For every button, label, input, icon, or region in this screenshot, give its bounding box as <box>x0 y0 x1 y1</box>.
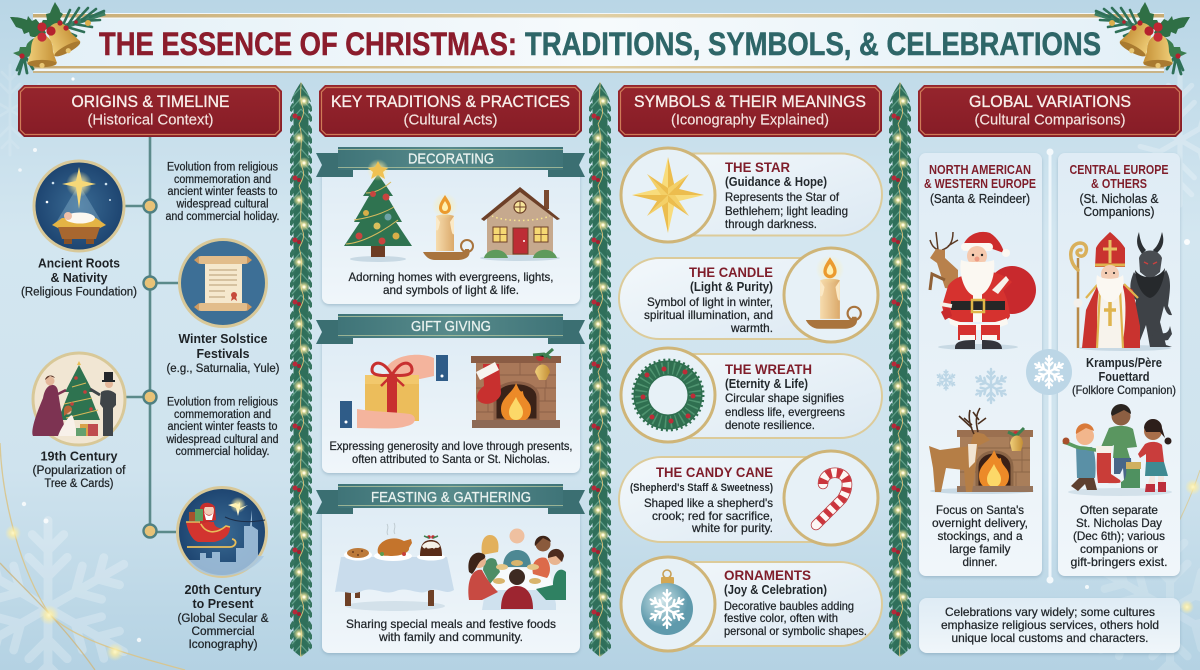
panel: the wreath <box>621 348 882 442</box>
icon: family gathering <box>468 528 566 610</box>
icon: saint nicholas <box>1071 232 1140 348</box>
icon: fireplace with stocking <box>471 349 561 428</box>
label: 20th century: Iconography) <box>188 639 258 651</box>
text: ornaments: festive color, often with <box>724 611 838 625</box>
text: santa description <box>932 503 1028 569</box>
heading: central europe <box>1070 163 1168 219</box>
text: evolution note one <box>166 162 280 223</box>
pill <box>619 457 861 542</box>
text: evolution note two: commercial holiday. <box>176 446 270 458</box>
heading: central europe: CENTRAL EUROPE <box>1070 163 1168 177</box>
heading: central europe: Companions) <box>1084 205 1154 219</box>
center divider with snowflake <box>1026 148 1072 584</box>
column header: symbols: (Iconography Explained) <box>671 112 829 128</box>
text: summary: Celebrations vary widely; some cultures <box>945 605 1155 619</box>
icon: candy cane medallion <box>784 451 878 545</box>
text: decorating description: and symbols of light & life. <box>383 283 519 297</box>
icon: decorating candle <box>423 193 473 260</box>
label: 20th century <box>178 583 269 651</box>
ribbon: decorating: DECORATING <box>408 150 494 168</box>
icon: santa sleigh over city <box>178 488 266 576</box>
text: evolution note one: and commercial holiday. <box>166 211 280 223</box>
heading: north america: & WESTERN EUROPE <box>924 177 1036 191</box>
panel: north american and western europe <box>919 153 1042 576</box>
text: the candle <box>644 265 773 335</box>
text: santa description: overnight delivery, <box>932 516 1028 530</box>
card <box>322 168 580 304</box>
text: the wreath: denote resilience. <box>725 418 815 432</box>
label: 20th century: Commercial <box>192 626 254 638</box>
column header: traditions: (Cultural Acts) <box>404 112 498 128</box>
panel: feasting <box>316 484 585 653</box>
label: winter solstice: Winter Solstice <box>178 332 268 346</box>
text: the star: Represents the Star of <box>725 190 840 204</box>
text: the star: THE STAR <box>725 160 790 175</box>
column header: origins: (Historical Context) <box>88 112 214 128</box>
text: the candy cane: THE CANDY CANE <box>656 465 773 480</box>
icon: scroll <box>180 240 266 326</box>
label: winter solstice <box>166 332 280 375</box>
text: the wreath: Circular shape signifies <box>725 391 844 405</box>
text: the candy cane: crook; red for sacrifice, <box>652 509 773 523</box>
panel: origins timeline <box>21 137 280 651</box>
garland divider 3 <box>889 82 911 657</box>
heading: north america: NORTH AMERICAN <box>929 163 1031 177</box>
column header: origins: ORIGINS & TIMELINE <box>72 92 230 111</box>
icon: santa <box>938 232 1036 350</box>
icon: holly and bells left <box>10 2 105 74</box>
text: evolution note one: widespread cultural <box>176 198 268 210</box>
label: ancient roots: Ancient Roots <box>38 256 120 270</box>
column header: symbols: SYMBOLS & THEIR MEANINGS <box>634 92 866 111</box>
ribbon: gift giving: GIFT GIVING <box>411 318 491 335</box>
text: santa description: Focus on Santa's <box>936 503 1024 517</box>
label: 19th century: (Popularization of <box>32 465 126 477</box>
text: st nicholas description: Often separate <box>1080 503 1158 517</box>
text: st nicholas description: companions or <box>1080 542 1158 556</box>
text: feasting description: Sharing special meals and festive foods <box>346 617 556 631</box>
text: evolution note two: commemoration and <box>174 409 271 421</box>
icon: reindeer behind santa <box>930 232 958 290</box>
pill <box>640 154 882 236</box>
icon: krampus <box>1079 232 1172 351</box>
icon: reindeer with fireplace <box>929 408 1034 494</box>
icon: wreath medallion <box>621 348 715 442</box>
text: evolution note two: Evolution from religious <box>167 396 278 408</box>
pill <box>640 354 882 438</box>
card <box>322 506 580 653</box>
column header: symbols <box>618 85 882 137</box>
garland divider 2 <box>589 82 611 657</box>
text: evolution note two <box>166 396 278 458</box>
text: the star: (Guidance & Hope) <box>725 175 827 189</box>
text: the candle: spiritual illumination, and <box>644 308 773 322</box>
text: feasting description <box>346 617 556 644</box>
label: winter solstice: Festivals <box>196 347 250 361</box>
text: santa description: large family <box>950 542 1010 556</box>
text: the candle: THE CANDLE <box>689 265 773 280</box>
text: evolution note two: widespread cultural and <box>166 434 278 446</box>
text: the wreath <box>725 362 845 432</box>
text: the wreath: THE WREATH <box>725 362 812 377</box>
label: ancient roots <box>21 256 137 298</box>
text: krampus label <box>1072 356 1176 397</box>
panel: central europe and others <box>1058 153 1180 576</box>
label: 20th century: to Present <box>192 597 254 611</box>
label: 20th century: 20th Century <box>184 583 262 597</box>
text: the wreath: endless life, evergreens <box>725 405 845 419</box>
text: evolution note two: ancient winter feasts to <box>168 421 278 433</box>
text: gift giving description <box>330 439 572 466</box>
icon: ornament medallion <box>621 557 715 651</box>
heading: central europe: (St. Nicholas & <box>1080 192 1159 206</box>
column header: traditions: KEY TRADITIONS & PRACTICES <box>331 92 570 111</box>
column header: traditions <box>319 85 582 137</box>
card <box>919 153 1042 576</box>
text: the candle: warmth. <box>730 321 773 335</box>
text: the star: Bethlehem; light leading <box>725 204 848 218</box>
text: ornaments: Decorative baubles adding <box>724 599 854 613</box>
label: 20th century: (Global Secular & <box>178 613 269 625</box>
text: ornaments: ORNAMENTS <box>724 568 811 583</box>
text: the candy cane: Shaped like a shepherd's <box>644 496 773 510</box>
text: the candy cane <box>630 465 773 535</box>
icon: candle medallion <box>784 248 878 342</box>
icon: holly and bells right <box>1095 2 1190 74</box>
heading: north america: (Santa & Reindeer) <box>930 192 1030 206</box>
title text: THE ESSENCE OF CHRISTMAS: <box>99 26 517 62</box>
ribbon: feasting <box>316 484 585 514</box>
column header: global: GLOBAL VARIATIONS <box>969 92 1131 111</box>
icon: children with boots <box>1062 404 1172 496</box>
card <box>1058 153 1180 576</box>
column header: origins <box>18 85 282 137</box>
text: decorating description: Adorning homes with evergreens, lights, <box>348 270 554 284</box>
panel: summary note <box>919 598 1180 653</box>
text: the star: through darkness. <box>725 217 817 231</box>
panel: decorating <box>316 147 585 304</box>
text: the candle: (Light & Purity) <box>690 280 773 294</box>
text: summary: unique local customs and characters. <box>952 631 1148 645</box>
icon: nativity <box>34 161 124 251</box>
pill <box>640 562 882 646</box>
column header: global: (Cultural Comparisons) <box>974 112 1126 128</box>
text: ornaments <box>724 568 867 638</box>
icon: feast table <box>335 523 454 611</box>
pill <box>619 258 861 339</box>
text: st nicholas description: gift-bringers exist. <box>1070 555 1168 569</box>
text: krampus label: Krampus/Père <box>1086 356 1162 370</box>
text: the candle: Symbol of light in winter, <box>647 295 773 309</box>
text: summary: emphasize religious services, others hold <box>941 618 1159 632</box>
label: ancient roots: & Nativity <box>50 271 108 285</box>
icon: star medallion <box>621 148 715 242</box>
label: ancient roots: (Religious Foundation) <box>21 286 137 298</box>
garland divider 1 <box>290 82 312 657</box>
text: gift giving description: often attributed to Santa or St. Nicholas. <box>352 452 550 466</box>
text: st nicholas description <box>1070 503 1168 569</box>
text: the wreath: (Eternity & Life) <box>725 377 808 391</box>
icon: hands with gift <box>340 355 448 428</box>
panel: the candle <box>619 248 878 342</box>
ribbon: decorating <box>316 147 585 177</box>
icon: christmas tree <box>344 159 412 262</box>
text: santa description: dinner. <box>962 555 998 569</box>
panel: ornaments <box>621 557 882 651</box>
text: ornaments: (Joy & Celebration) <box>724 583 827 597</box>
text: evolution note one: Evolution from religious <box>167 162 278 174</box>
card <box>322 336 580 473</box>
text: santa description: stockings, and a <box>938 529 1023 543</box>
text: st nicholas description: (Dec 6th); various <box>1073 529 1165 543</box>
text: evolution note one: commemoration and <box>174 174 271 186</box>
icon: house <box>480 187 560 261</box>
panel: gift giving <box>316 314 585 473</box>
text: krampus label: (Folklore Companion) <box>1072 383 1176 397</box>
label: winter solstice: (e.g., Saturnalia, Yule) <box>166 363 280 375</box>
panel: the candy cane <box>619 451 878 545</box>
text: st nicholas description: St. Nicholas Day <box>1076 516 1162 530</box>
icon: small snowflakes <box>936 369 1008 403</box>
text: feasting description: with family and community. <box>378 630 523 644</box>
heading: north america <box>924 163 1036 206</box>
heading: central europe: & OTHERS <box>1091 177 1147 191</box>
title text: TRADITIONS, SYMBOLS, & CELEBRATIONS <box>525 26 1101 62</box>
title banner <box>33 13 1164 73</box>
text: evolution note one: ancient winter feasts to <box>168 186 278 198</box>
label: 19th century <box>32 450 126 490</box>
column header: global <box>918 85 1182 137</box>
text: gift giving description: Expressing generosity and love through presents, <box>330 439 572 453</box>
text: the candy cane: (Shepherd's Staff & Sweetness) <box>630 482 773 494</box>
label: 19th century: Tree & Cards) <box>44 478 114 490</box>
panel: the star <box>621 148 882 242</box>
label: 19th century: 19th Century <box>40 450 118 464</box>
icon: victorian family <box>32 353 125 445</box>
text: ornaments: personal or symbolic shapes. <box>724 624 867 638</box>
text: summary <box>941 605 1159 645</box>
text: the star <box>725 160 848 231</box>
ribbon: gift giving <box>316 314 585 344</box>
text: the candy cane: white for purity. <box>691 521 773 535</box>
timeline spine and nodes <box>125 137 180 538</box>
text: krampus label: Fouettard <box>1098 370 1150 384</box>
text: decorating description <box>348 270 554 297</box>
ribbon: feasting: FEASTING & GATHERING <box>371 489 531 506</box>
